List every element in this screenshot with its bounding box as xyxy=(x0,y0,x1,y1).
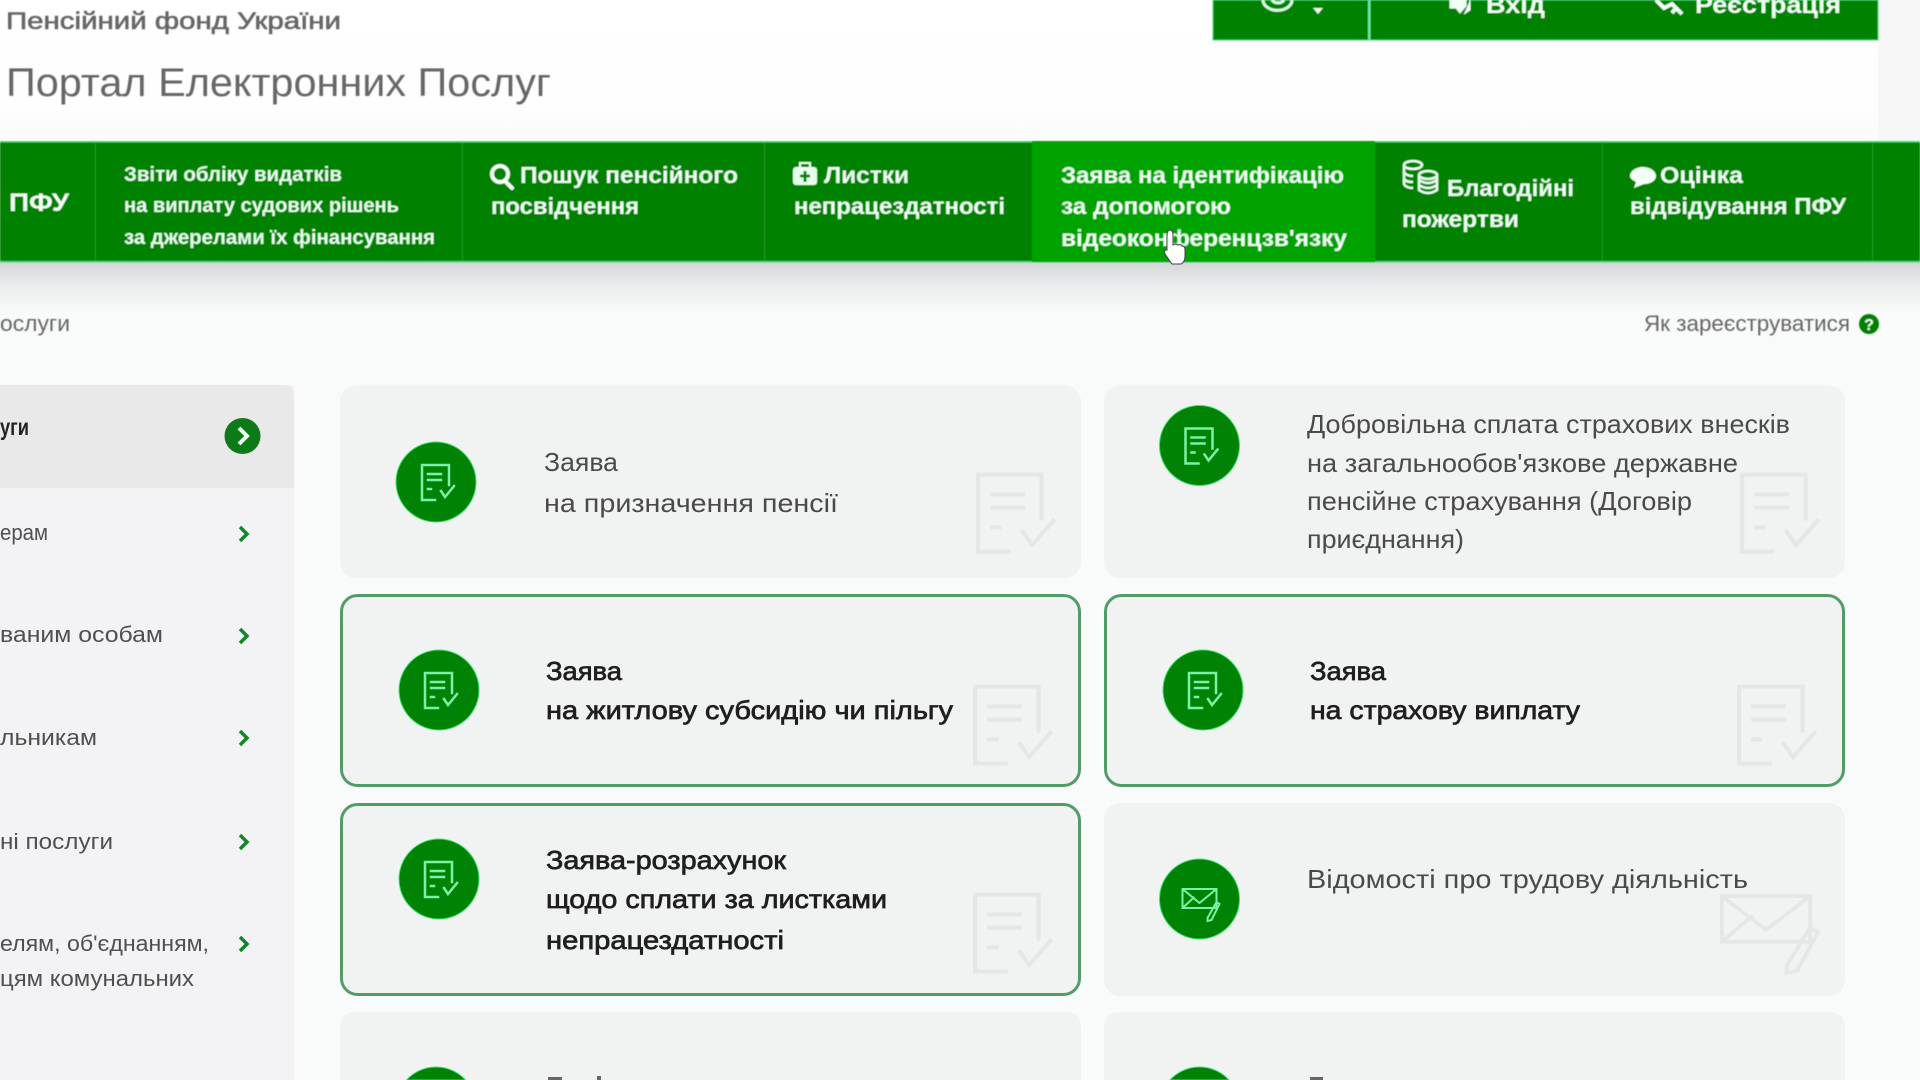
organisation name: Пенсійний фонд України xyxy=(6,8,341,35)
watermark icon xyxy=(975,687,1050,764)
card: bottom right partial xyxy=(1104,1012,1845,1080)
icon circle xyxy=(1160,859,1240,939)
icon: registration key xyxy=(1656,0,1682,14)
card: employment records xyxy=(1104,803,1845,996)
nav item: PFU: ПФУ xyxy=(9,189,69,217)
card text: Заява-розрахунок xyxy=(546,845,787,875)
sidebar active item xyxy=(0,414,260,454)
card text: Заява xyxy=(544,447,619,477)
nav item: visit rating xyxy=(1630,162,1847,219)
icon: magnifier xyxy=(492,166,512,188)
icon circle, cut off by the frame xyxy=(406,1067,466,1080)
card text: непрацездатності xyxy=(546,925,784,955)
nav item: pension ID search: посвідчення xyxy=(491,193,639,219)
nav item: video identification (active): відеоконференцзв'язку xyxy=(1061,225,1347,251)
nav item: video identification (active): за допомогою xyxy=(1061,193,1231,219)
header titles xyxy=(6,8,551,105)
icon circle xyxy=(1163,650,1243,730)
card text: приєднання) xyxy=(1307,524,1464,554)
icon: dropdown caret xyxy=(1313,8,1323,14)
icon: medical case xyxy=(793,163,817,185)
sidebar menu xyxy=(0,385,294,1080)
nav item: visit rating: Оцінка xyxy=(1660,162,1743,188)
sidebar active item: уги xyxy=(0,414,29,440)
icon: help xyxy=(1859,314,1879,334)
breadcrumb: ослуги xyxy=(0,311,70,336)
card text: Відомості про трудову діяльність xyxy=(1307,864,1748,894)
nav item: video identification (active): Заява на ідентифікацію xyxy=(1061,162,1344,188)
nav item: charity donations: пожертви xyxy=(1402,206,1519,232)
icon: speech bubble xyxy=(1630,167,1656,188)
nav item: charity donations: Благодійні xyxy=(1447,175,1574,201)
card text: на призначення пенсії xyxy=(544,488,838,518)
sidebar item labels: ваним особам xyxy=(0,622,163,647)
sidebar item labels xyxy=(0,520,209,991)
watermark envelope icon xyxy=(1722,896,1818,973)
nav item: pension ID search xyxy=(491,162,738,219)
card: voluntary insurance contributions xyxy=(1104,386,1845,578)
nav item: expense reports: за джерелами їх фінансування xyxy=(124,227,435,249)
card: insurance payment xyxy=(1106,596,1844,786)
watermark icon xyxy=(1742,475,1817,552)
top account buttons xyxy=(1213,0,1878,40)
card text xyxy=(544,447,838,518)
nav item: sick leave: непрацездатності xyxy=(794,193,1005,219)
card text: на страхову виплату xyxy=(1310,695,1580,725)
nav item: sick leave: Листки xyxy=(824,162,909,188)
navigation bar xyxy=(0,141,1920,262)
sidebar item labels: ерам xyxy=(0,520,48,545)
card text: щодо сплати за листками xyxy=(546,884,887,914)
card text: на загальнообов'язкове державне xyxy=(1307,448,1738,478)
card text xyxy=(1310,656,1580,725)
card: sick leave payment calculation xyxy=(342,804,1080,994)
navigation shadow xyxy=(0,262,1920,312)
card: pension application xyxy=(340,386,1081,578)
card: housing subsidy xyxy=(342,596,1080,786)
nav item: expense reports: на виплату судових рішень xyxy=(124,195,399,217)
sidebar item labels: елям, об'єднанням, xyxy=(0,931,209,956)
cropped top of the unreadable card text xyxy=(1310,1077,1323,1080)
card: bottom left partial xyxy=(340,1012,1081,1080)
icon: coins xyxy=(1404,161,1437,193)
card text: Заява xyxy=(546,656,623,686)
icon circle, cut off by the frame xyxy=(1170,1067,1229,1080)
icon circle xyxy=(1160,406,1240,486)
watermark icon xyxy=(975,895,1050,972)
how to register link: Як зареєструватися xyxy=(1644,311,1850,336)
card text: Добровільна сплата страхових внесків xyxy=(1307,409,1790,439)
card text xyxy=(546,845,887,955)
icon: login xyxy=(1450,0,1470,14)
card text xyxy=(546,656,953,725)
nav item: expense reports xyxy=(124,164,435,249)
sidebar item labels: цям комунальних xyxy=(0,966,194,991)
icon circle xyxy=(396,442,476,522)
mouse cursor xyxy=(1164,230,1185,264)
nav item: video identification (active) xyxy=(1032,141,1375,262)
header background xyxy=(0,0,1920,141)
nav item: charity donations xyxy=(1402,161,1574,232)
watermark icon xyxy=(978,475,1053,552)
icon: help: ? xyxy=(1864,317,1874,334)
card text: Заява xyxy=(1310,656,1387,686)
watermark icon xyxy=(1739,687,1814,764)
nav item: visit rating: відвідування ПФУ xyxy=(1630,193,1847,219)
sidebar item labels: льникам xyxy=(0,725,97,750)
icon circle xyxy=(399,650,479,730)
card text xyxy=(1307,409,1790,554)
nav item: pension ID search: Пошук пенсійного xyxy=(520,162,738,188)
icon circle xyxy=(399,839,479,919)
icon: language globe xyxy=(1263,0,1292,10)
cropped tops of the unreadable card text xyxy=(548,1076,601,1080)
card text: пенсійне страхування (Договір xyxy=(1307,486,1692,516)
card text: на житлову субсидію чи пільгу xyxy=(546,695,953,725)
nav item: sick leave xyxy=(793,162,1005,219)
sidebar item labels: ні послуги xyxy=(0,829,113,854)
sidebar chevrons xyxy=(240,527,247,951)
nav item: expense reports: Звіти обліку видатків xyxy=(124,164,342,186)
icon: arrow circle xyxy=(224,418,260,454)
portal title: Портал Електронних Послуг xyxy=(6,61,551,105)
